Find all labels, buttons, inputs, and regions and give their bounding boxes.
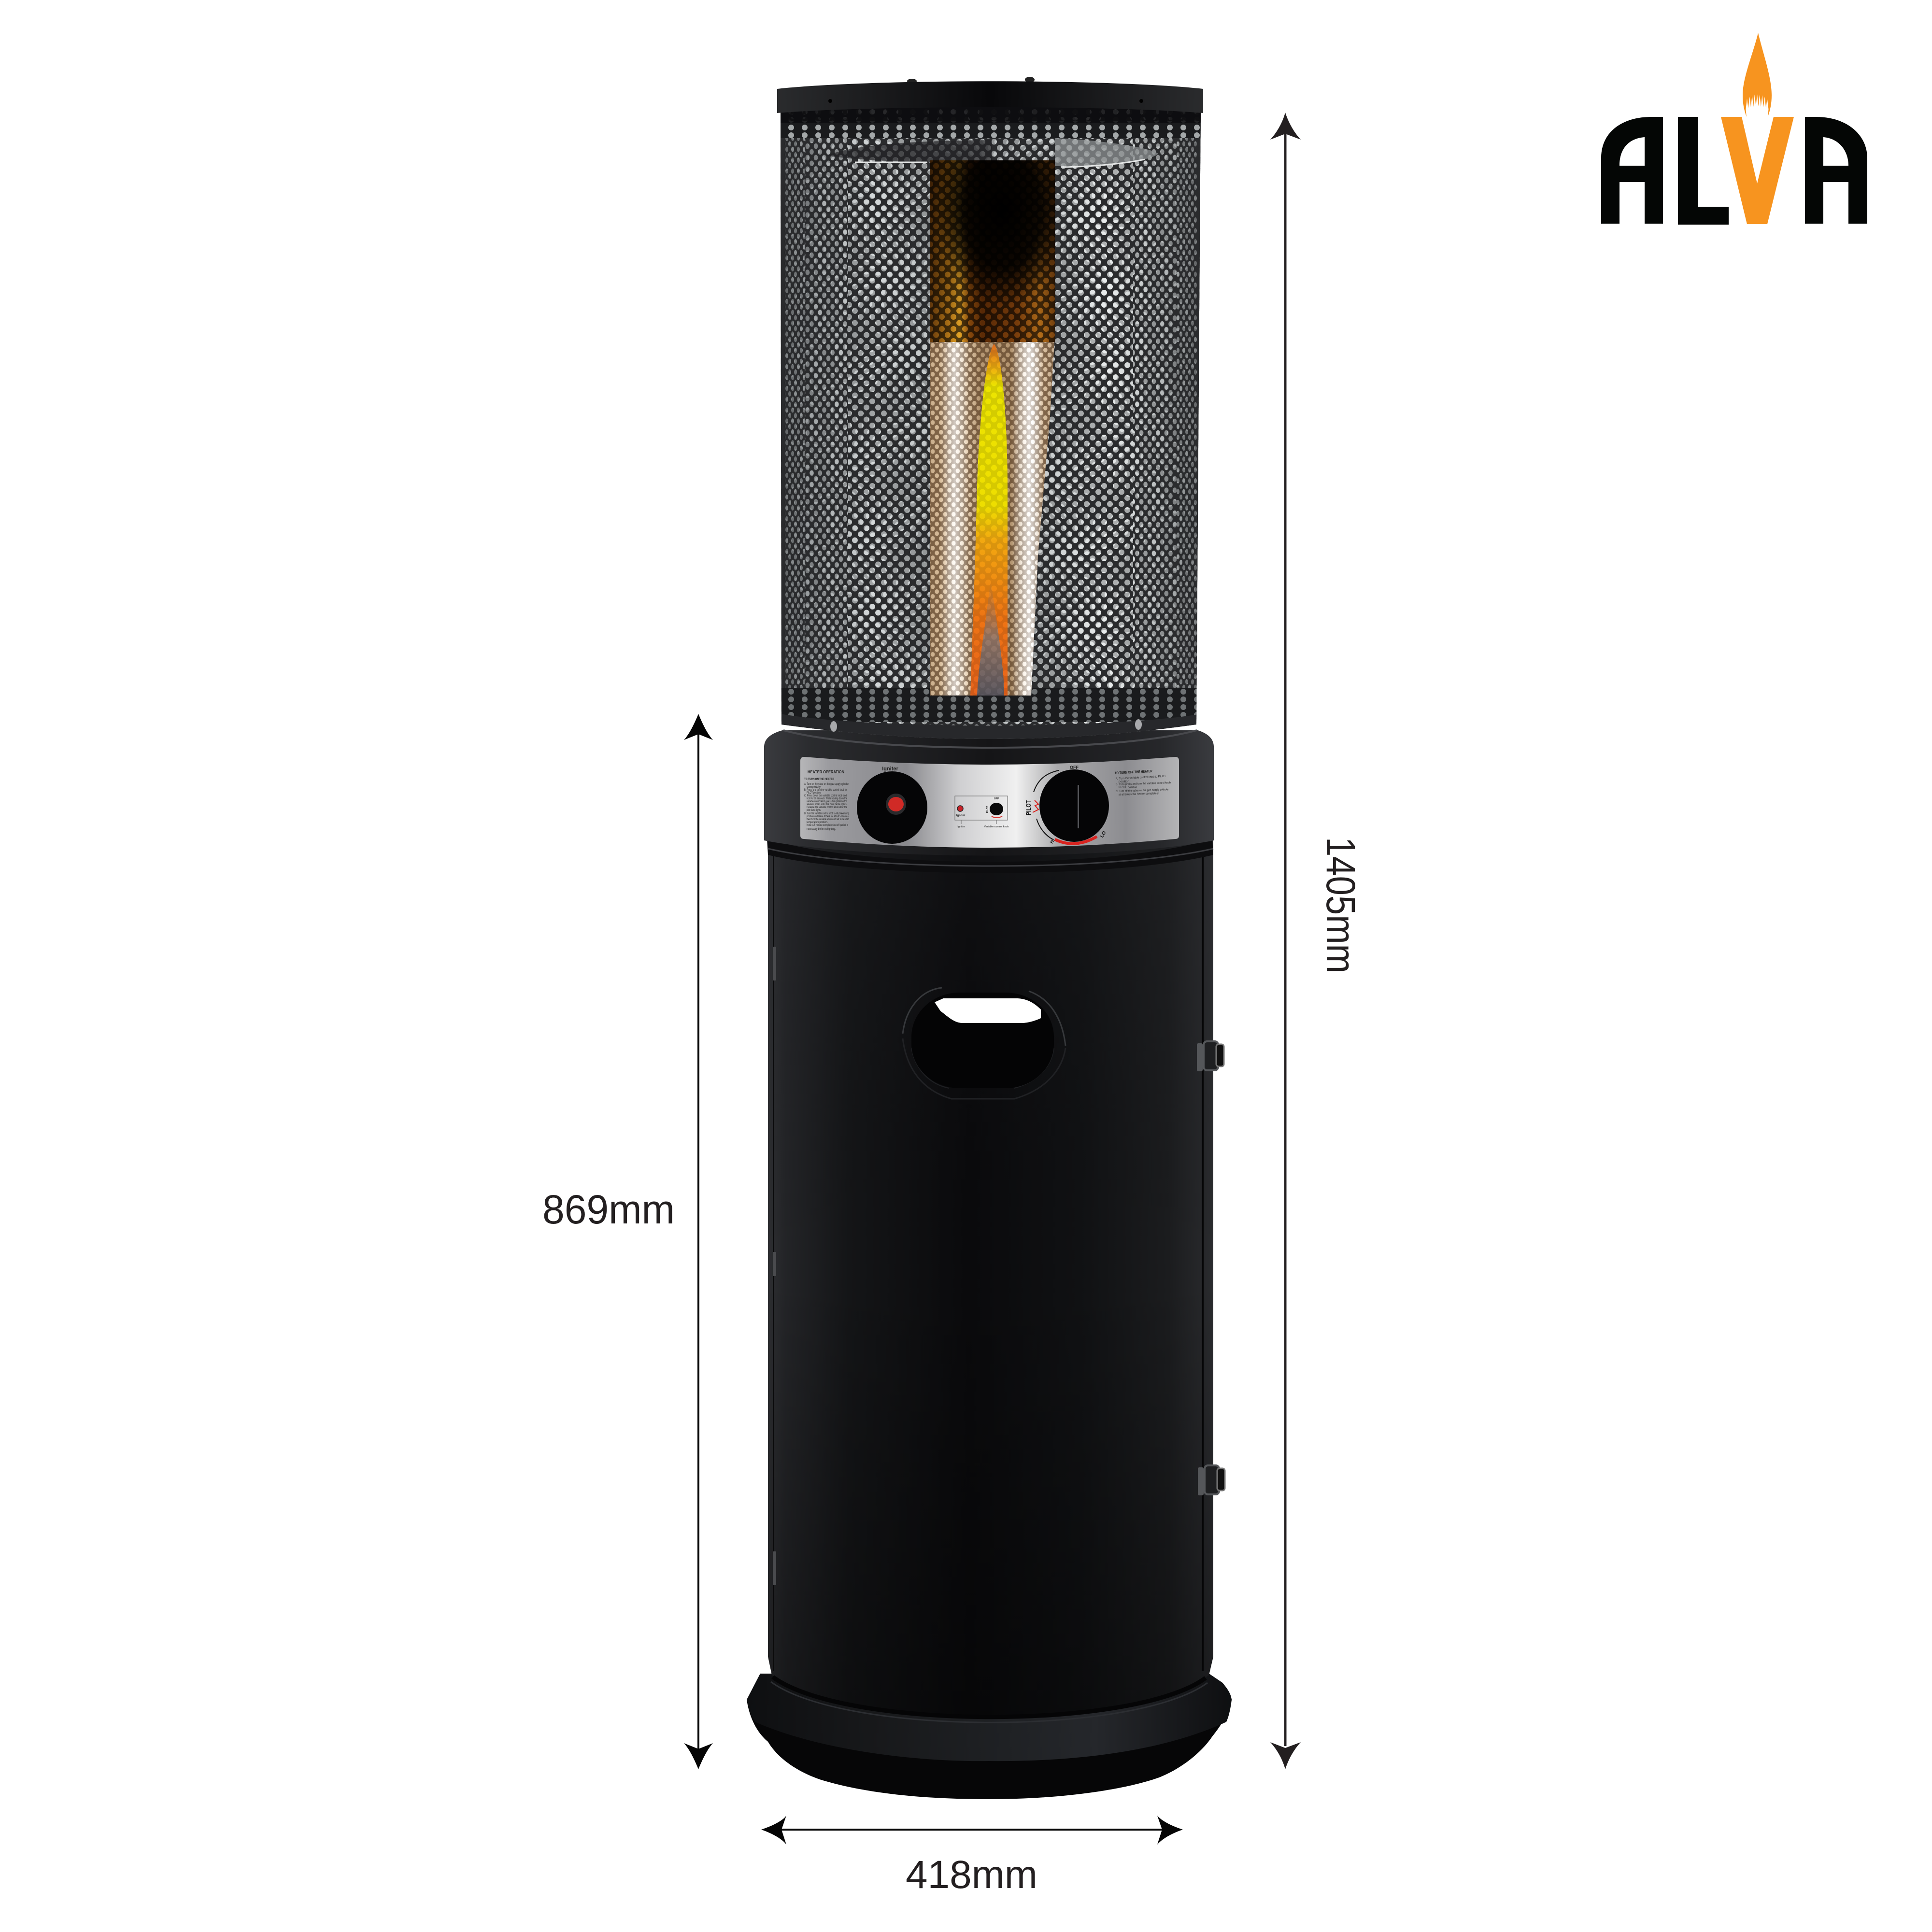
logo flame (1743, 33, 1772, 117)
logo letter A second (1805, 117, 1867, 224)
heater main cylinder body (768, 840, 1213, 1722)
mini diagram: Variable control knob (984, 825, 1009, 828)
panel text: heater operation: position and leave it there for about 5 minutes, (807, 815, 849, 818)
panel text: turn off: to OFF position. (1119, 786, 1138, 789)
screws (830, 719, 1142, 732)
front mesh strips (781, 106, 1201, 744)
dimension arrow: 418mm width (761, 1816, 1183, 1845)
panel text: heater operation: completely. (807, 786, 821, 789)
panel text: turn off: at all times the heater completely. (1119, 792, 1159, 796)
panel text: heater operation: temperature position. (807, 821, 828, 824)
variable control knob (1024, 765, 1109, 845)
top plate (777, 77, 1203, 113)
solid bottom ring (781, 714, 1197, 739)
variable control knob: LO (1099, 830, 1108, 839)
upper dark heat tube (930, 160, 1055, 342)
panel text: heater operation: several times until the pilot flame lights. (807, 803, 847, 806)
stainless control panel (800, 757, 1179, 848)
panel text: heater operation: A. Turn on the valve on the gas supply cylinder (804, 783, 849, 786)
dimension label: 418mm: 418mm (906, 1853, 1037, 1897)
panel text: heater operation: Note: A 5 minute complete shut off period is (807, 824, 848, 827)
dimension label: 1405mm: 1405mm (1318, 837, 1364, 973)
dimension arrow: 1405mm height (1270, 113, 1301, 1769)
panel text: heater operation: pilot flame lights. (807, 809, 821, 812)
mini diagram (955, 796, 1009, 828)
logo letter A (1601, 117, 1663, 224)
variable control knob: HI (1049, 838, 1056, 845)
panel text: heater operation: TO TURN ON THE HEATER (804, 778, 834, 781)
panel text: turn off (1115, 769, 1171, 796)
panel text: heater operation: B. Press and turn the variable control knob to (804, 789, 847, 792)
dimension arrow: 869mm height (684, 714, 713, 1769)
panel text: heater operation: HEATER OPERATION (808, 770, 844, 774)
panel text: turn off: position. (1119, 781, 1130, 783)
panel text: heater operation: Release the variable control knob after the (807, 806, 847, 809)
panel text: heater operation: PILOT position. (807, 792, 821, 795)
panel text: turn off: TO TURN OFF THE HEATER (1115, 769, 1152, 775)
heat reflector disc (826, 138, 1158, 167)
panel text: turn off: A. Turn the variable control knob to PILOT (1116, 775, 1166, 781)
heater base (747, 1674, 1232, 1799)
panel text: heater operation: then turn the variable knob and set to desired (807, 818, 849, 821)
logo letter L (1678, 117, 1729, 225)
panel text: heater operation: C. Press down the variable control knob and (804, 795, 847, 797)
dimension label: 869mm: 869mm (542, 1187, 675, 1232)
lower glowing heat tube (930, 342, 1054, 696)
variable control knob: PILOT (1024, 800, 1032, 815)
panel text: turn off: C. Turn off the valve on the gas supply cylinder (1116, 788, 1169, 793)
bottom perforated band (781, 688, 1201, 722)
panel text: heater operation (804, 770, 849, 831)
panel text: turn off: B. Then press and turn the variable control knob (1116, 781, 1171, 786)
logo letter V (1721, 117, 1794, 224)
igniter button: Igniter (882, 766, 899, 772)
mesh guard with heat tube (777, 77, 1203, 746)
mini diagram: Igniter (957, 825, 965, 828)
mini diagram: OFF (994, 797, 999, 800)
flame (970, 344, 1008, 696)
panel text: heater operation: hold for 60 seconds. While holding down the (807, 797, 847, 800)
panel text: heater operation: variable control knob, press the igniter button (807, 800, 847, 803)
side clips (773, 947, 776, 1585)
control collar (764, 730, 1214, 873)
heater product illustration (747, 77, 1232, 1799)
top perforated band (781, 107, 1201, 138)
panel text: heater operation: D. Turn the variable control knob to HI (maximum) (804, 812, 849, 815)
panel text: heater operation: necessary before relighting. (807, 828, 836, 831)
door hinge lower (1198, 1465, 1225, 1495)
body handle cut-out (903, 988, 1065, 1099)
mini diagram: PILOT (986, 806, 989, 813)
mini diagram: Igniter (956, 814, 966, 817)
variable control knob: OFF (1070, 765, 1079, 770)
igniter button (857, 766, 927, 844)
door hinge upper (1197, 1041, 1224, 1071)
logo: ALVA (1601, 33, 1867, 225)
